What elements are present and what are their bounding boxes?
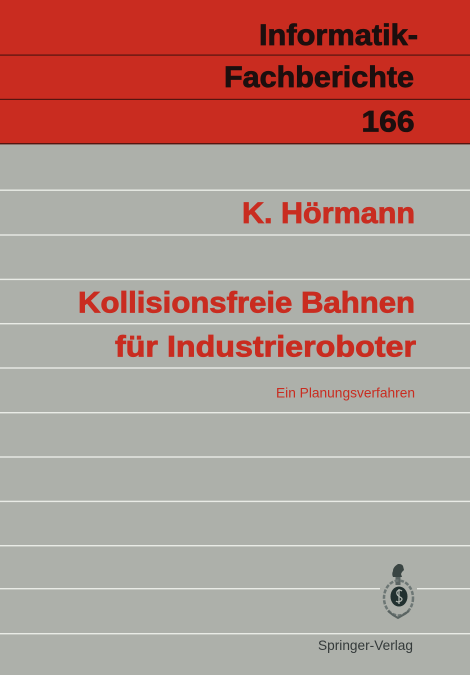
grey background panel [0,144,470,675]
book title [78,286,416,364]
book title: für Industrieroboter [115,330,416,364]
author: K. Hörmann [242,197,415,230]
subtitle: Ein Planungsverfahren [276,384,415,400]
volume number: 166 [362,106,414,138]
series title [224,19,418,94]
series title: Fachberichte [224,61,414,94]
icon: Springer chess knight logo [384,564,413,618]
book title: Kollisionsfreie Bahnen [78,286,415,320]
red series band [0,0,470,144]
series title: Informatik- [259,19,418,52]
publisher name: Springer-Verlag [318,637,413,653]
